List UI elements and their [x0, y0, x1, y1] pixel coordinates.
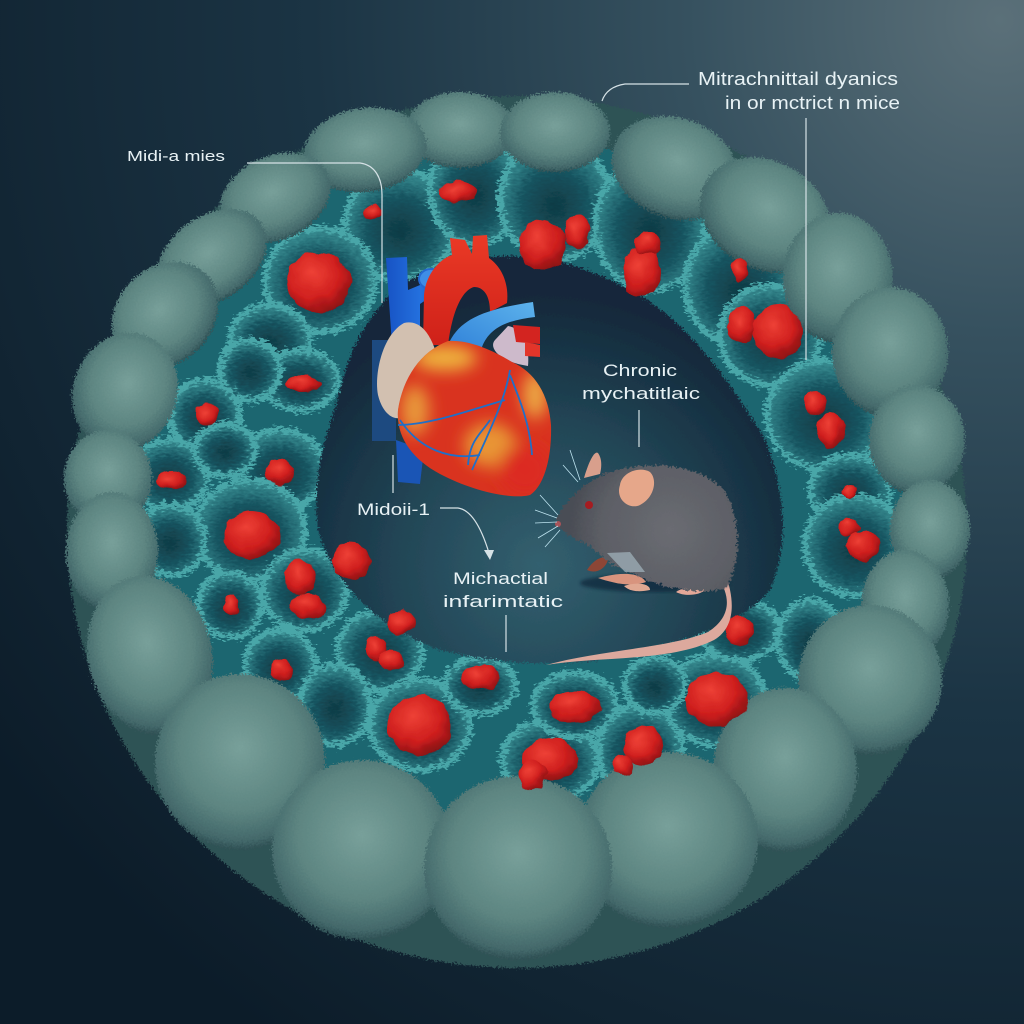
ring of tissue — [56, 92, 970, 968]
left atrium pale — [377, 322, 440, 418]
leader line — [638, 410, 640, 447]
leader line — [247, 163, 382, 303]
upper blue vessel — [386, 257, 444, 345]
belly — [607, 552, 645, 572]
red blobs — [156, 181, 878, 791]
teal pits — [132, 135, 905, 800]
teal inner band — [130, 140, 910, 860]
label: Midi-a mies — [127, 148, 382, 303]
whiskers — [535, 450, 580, 547]
label: Michactial: infarimtatic — [443, 592, 564, 611]
nose — [555, 521, 561, 527]
text: Mitrachnittail dyanics — [698, 69, 898, 89]
label: Michactial — [443, 569, 564, 652]
ground shadow — [580, 574, 730, 592]
leader line — [602, 84, 689, 101]
pulmonary artery light blue — [448, 302, 535, 352]
label: Chronic: mychatitlaic — [582, 384, 701, 403]
leader line with arrow — [440, 508, 489, 553]
central hole — [316, 256, 783, 663]
pulmonary vessels — [513, 325, 540, 344]
text: Michactial — [453, 569, 548, 588]
main heart body — [398, 340, 552, 496]
label: Chronic — [582, 361, 701, 447]
text: Midi-a mies — [127, 148, 225, 165]
tail — [546, 576, 732, 665]
paws — [587, 557, 608, 572]
icon: heart — [372, 235, 560, 500]
leader line — [505, 615, 507, 652]
lower vena cava — [372, 340, 396, 441]
text: Chronic — [603, 361, 678, 380]
ring shadow base — [67, 96, 967, 968]
body — [556, 465, 738, 591]
coronary vessels — [398, 370, 532, 470]
label: top right: in or mctrict n mice — [725, 93, 900, 113]
outer lumps — [56, 92, 970, 960]
label: Midoii-1 — [357, 455, 494, 560]
eye — [585, 501, 593, 509]
icon: mouse — [535, 450, 738, 665]
ears — [584, 453, 601, 478]
label: top right — [602, 69, 900, 360]
text: Midoii-1 — [357, 500, 430, 519]
red aorta — [423, 235, 507, 345]
